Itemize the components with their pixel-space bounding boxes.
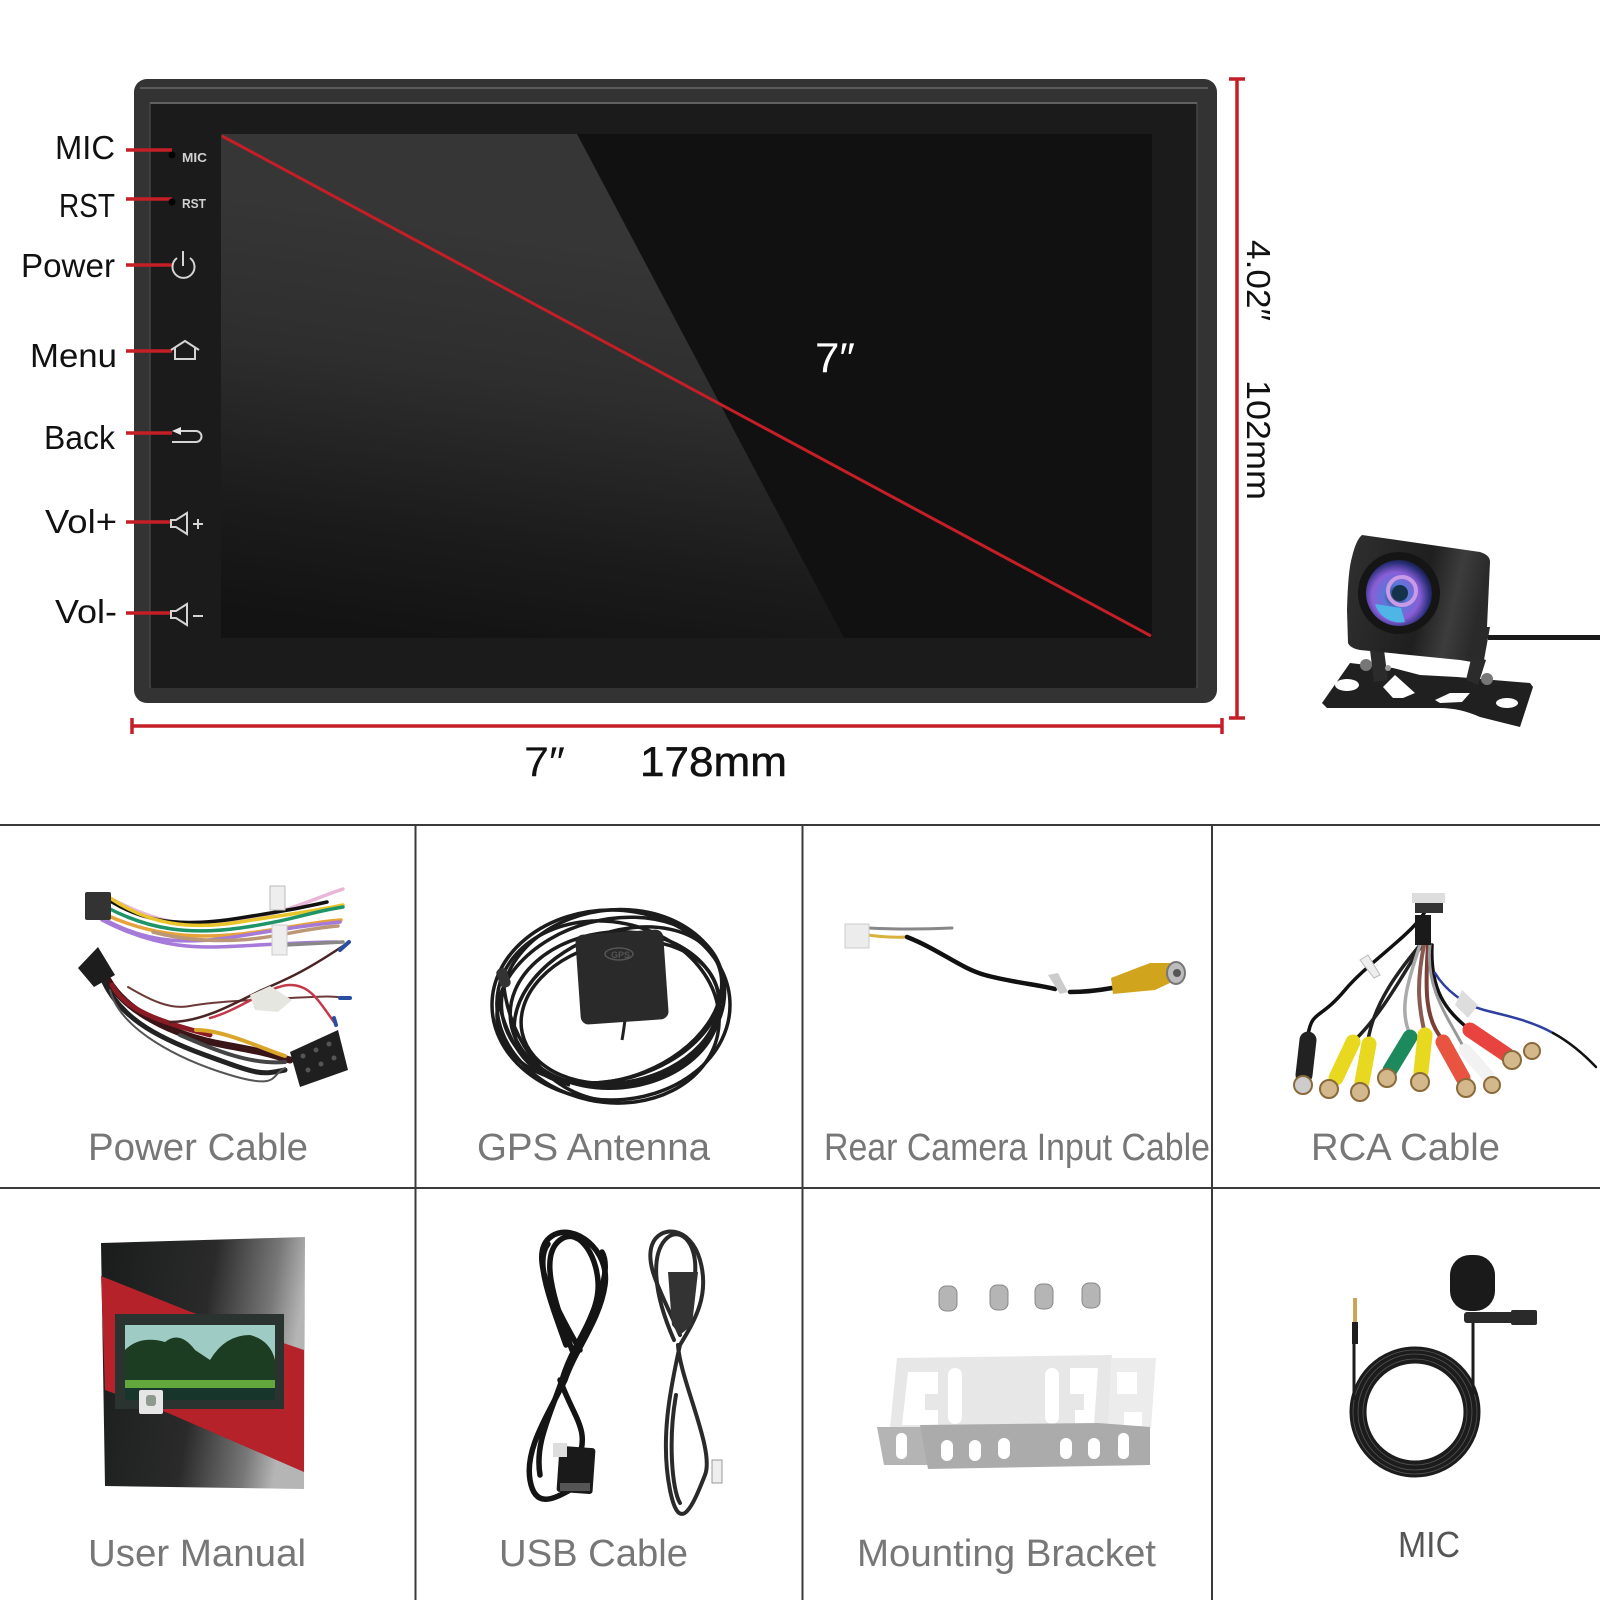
height labels (1240, 240, 1277, 500)
camera body (1347, 535, 1490, 663)
caption: Mounting Bracket (857, 1533, 1156, 1575)
caption: USB Cable (499, 1533, 688, 1575)
height labels: 102mm (1240, 380, 1277, 500)
width labels: 178mm (640, 738, 787, 785)
icon: power (172, 251, 195, 278)
flange slots (896, 1433, 1129, 1461)
red band (101, 1276, 304, 1472)
width dimension line (131, 718, 1222, 734)
camera cable (1488, 635, 1600, 640)
label Menu: Menu (30, 337, 117, 374)
side buttons (168, 150, 208, 625)
height labels: 4.02″ (1240, 240, 1277, 321)
icon: volume down (171, 604, 203, 625)
cable tag (1048, 973, 1068, 994)
coiled second cable (650, 1231, 707, 1514)
MIC hole and text (168, 150, 208, 165)
front flange (920, 1423, 1150, 1469)
caption: MIC (1398, 1524, 1460, 1565)
android badge (139, 1390, 163, 1414)
panel: power cable (78, 886, 350, 1169)
rear flange (877, 1427, 1150, 1465)
diagonal size label: 7″ (815, 334, 855, 381)
head unit screen (134, 79, 1217, 703)
antenna puck: GPS (611, 950, 630, 960)
label RST: RST (59, 187, 115, 224)
label Power: Power (21, 247, 115, 284)
caption: Rear Camera Input Cable (824, 1127, 1210, 1169)
height dimension line (1229, 78, 1245, 718)
label Vol+: Vol+ (45, 503, 117, 540)
right plate (1108, 1358, 1156, 1428)
coiled mic cable (1353, 1322, 1477, 1474)
MIC hole and text: MIC (182, 150, 208, 165)
RST hole and text: RST (182, 196, 206, 211)
USB socket (553, 1443, 596, 1494)
label Vol-: Vol- (55, 593, 117, 630)
white connector (845, 924, 869, 948)
screws (939, 1283, 1100, 1311)
caption: Power Cable (88, 1127, 308, 1169)
top connector (1360, 893, 1478, 1018)
antenna plug (495, 967, 512, 989)
camera brackets and screws (1360, 650, 1493, 685)
panel: mounting bracket (857, 1283, 1156, 1575)
caption: User Manual (88, 1533, 306, 1575)
input cable wires (868, 928, 1112, 992)
RCA plugs (1304, 1030, 1507, 1082)
panel: MIC (1352, 1255, 1537, 1565)
diagonal size line (222, 136, 1151, 636)
panel: user manual (88, 1237, 306, 1575)
icon: volume up (171, 513, 203, 534)
accessories grid (0, 825, 1600, 1600)
camera mounting plate (1322, 663, 1533, 727)
lens (1358, 552, 1440, 634)
yellow RCA plug (1111, 962, 1185, 994)
antenna cable loops (478, 893, 745, 1123)
antenna puck (575, 929, 669, 1040)
lower harness (78, 942, 350, 1087)
plate cutouts (902, 1368, 1142, 1426)
jack plug (1352, 1298, 1358, 1344)
RCA plug tips (1294, 1043, 1540, 1101)
label Back: Back (44, 419, 115, 456)
side button labels with leader lines (21, 129, 172, 630)
panel: RCA cable (1294, 893, 1596, 1169)
mic foam (1450, 1255, 1495, 1311)
upper harness (85, 886, 343, 955)
manual cover (101, 1237, 305, 1489)
width labels (524, 738, 787, 785)
USB plug (668, 1272, 698, 1335)
small white connector (712, 1460, 722, 1483)
icon: home (171, 341, 199, 359)
coiled USB cable (529, 1232, 605, 1499)
caption: GPS Antenna (477, 1127, 711, 1169)
RST hole and text (168, 196, 206, 211)
bundle wires (1308, 905, 1596, 1067)
label MIC: MIC (55, 129, 115, 166)
back plate (890, 1355, 1112, 1428)
icon: back (172, 427, 202, 442)
panel: rear camera input cable (824, 924, 1210, 1169)
width labels: 7″ (524, 738, 565, 785)
tablet picture (115, 1314, 284, 1409)
caption: RCA Cable (1311, 1127, 1500, 1169)
panel: USB cable (499, 1231, 722, 1575)
leader lines (126, 150, 172, 613)
panel: GPS antenna (477, 893, 745, 1169)
rear camera (1322, 535, 1600, 727)
mic clip (1464, 1310, 1537, 1325)
plate holes (1335, 675, 1518, 708)
